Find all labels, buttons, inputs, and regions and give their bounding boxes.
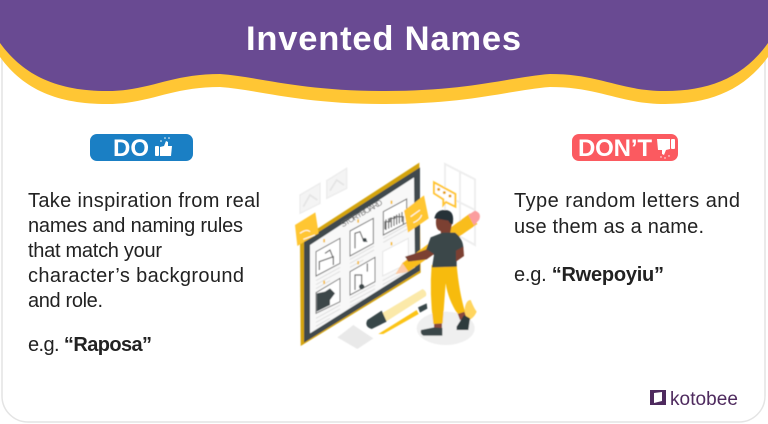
left text block: character’s background (28, 265, 244, 287)
trousers (431, 265, 465, 324)
chat bubble icon (434, 182, 455, 207)
left text block: names and naming rules (28, 215, 243, 237)
ground shadow (417, 312, 475, 345)
DON'T badge: DON’T (578, 135, 652, 162)
right text block: Type random letters and (514, 190, 740, 212)
right text block (514, 190, 740, 286)
illustration: storyboard and character (294, 162, 480, 349)
shoes (421, 327, 442, 336)
panel sketches (319, 212, 403, 290)
logo: kotobee: kotobee (670, 389, 738, 410)
DON'T badge (572, 134, 678, 162)
head (436, 211, 452, 236)
storyboard heading: STORYBOARD (339, 198, 384, 229)
marker (382, 289, 426, 322)
shirt (426, 233, 463, 267)
socks (434, 311, 467, 329)
yellow wave (0, 0, 768, 104)
purple wave (0, 0, 768, 91)
panel markers (323, 201, 392, 284)
pen (378, 310, 419, 334)
paper on floor (337, 325, 373, 349)
left example: e.g. “Raposa” (28, 334, 152, 356)
background frames (300, 164, 475, 245)
storyboard panels (316, 199, 408, 313)
title: Invented Names (246, 20, 521, 58)
DO badge: DO (113, 135, 149, 162)
left text block: that match your (28, 240, 162, 262)
header banner (0, 0, 768, 104)
sticky notes (295, 212, 319, 246)
left text block (28, 190, 260, 356)
left text block: and role. (28, 290, 103, 312)
icon: thumbs down (657, 139, 675, 159)
caption lines (316, 225, 408, 326)
plant (464, 300, 477, 322)
right text block: use them as a name. (514, 216, 704, 238)
right example: e.g. “Rwepoyiu” (514, 264, 664, 286)
large pencil (396, 213, 477, 274)
storyboard frame (300, 163, 421, 346)
DO badge (90, 134, 193, 162)
icon: book (650, 390, 666, 405)
left text block: Take inspiration from real (28, 190, 260, 212)
icon: thumbs up (155, 137, 172, 156)
arms (405, 249, 434, 262)
character (405, 210, 470, 336)
